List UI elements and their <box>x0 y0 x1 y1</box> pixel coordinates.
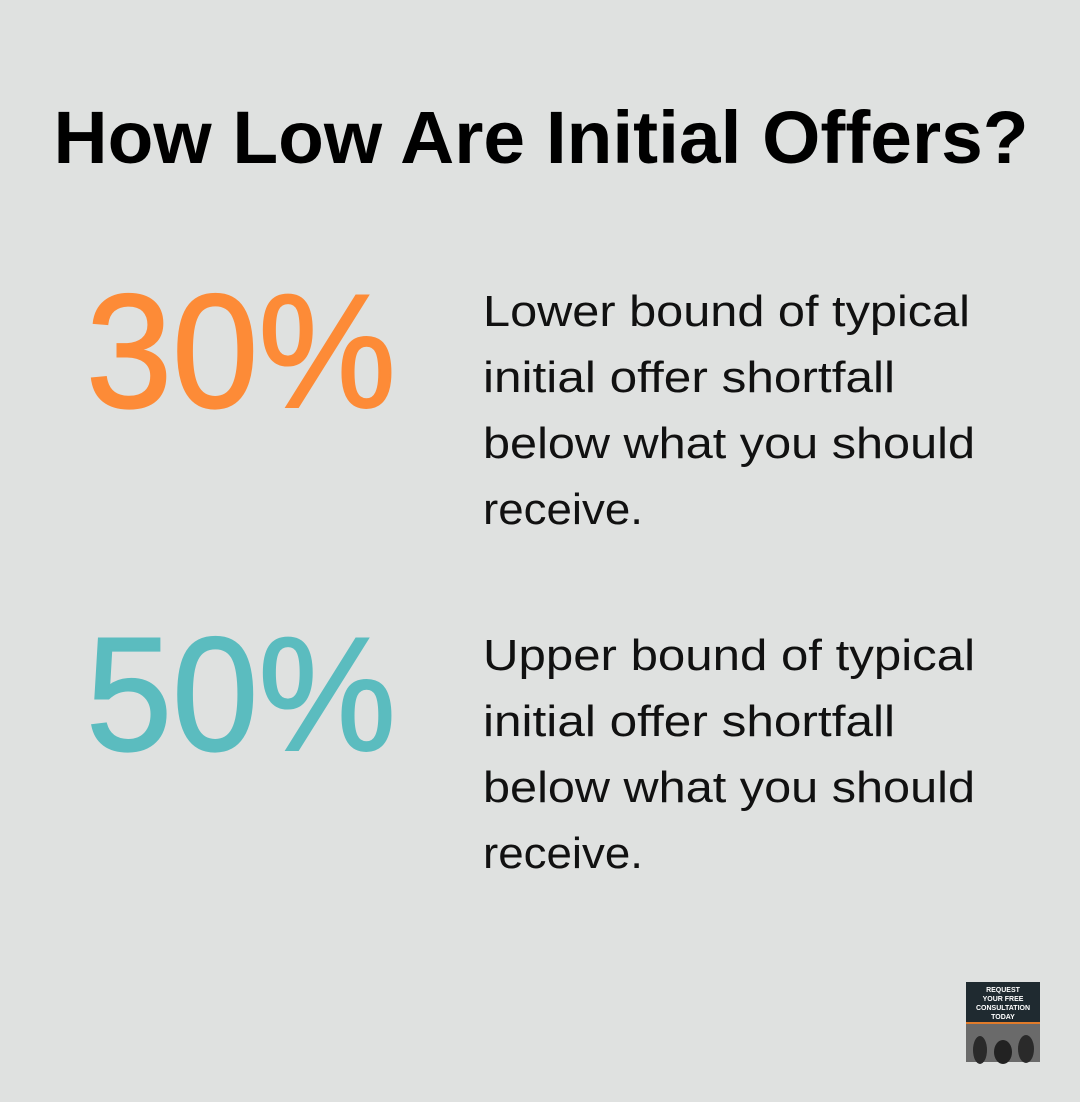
description 30%: initial offer shortfall <box>483 353 895 402</box>
title: How Low Are Initial Offers? <box>54 96 1028 179</box>
description 30%: Lower bound of typical <box>483 287 970 336</box>
stat: 30% <box>86 261 975 534</box>
logo: request consultation: REQUEST <box>986 987 1021 994</box>
description 50%: receive. <box>483 829 643 878</box>
stat: 50% <box>86 604 975 878</box>
logo: request consultation <box>966 982 1040 1064</box>
logo: request consultation: CONSULTATION <box>976 1005 1030 1012</box>
description 50%: Upper bound of typical <box>483 631 975 680</box>
number 50%: 50% <box>86 604 396 785</box>
logo: request consultation: YOUR FREE <box>983 996 1024 1003</box>
description 30% <box>483 287 975 534</box>
description 50%: below what you should <box>483 763 975 812</box>
logo: request consultation: TODAY <box>991 1014 1015 1021</box>
number 30%: 30% <box>86 261 396 442</box>
description 30%: receive. <box>483 485 643 534</box>
description 30%: below what you should <box>483 419 975 468</box>
description 50% <box>483 631 975 878</box>
description 50%: initial offer shortfall <box>483 697 895 746</box>
